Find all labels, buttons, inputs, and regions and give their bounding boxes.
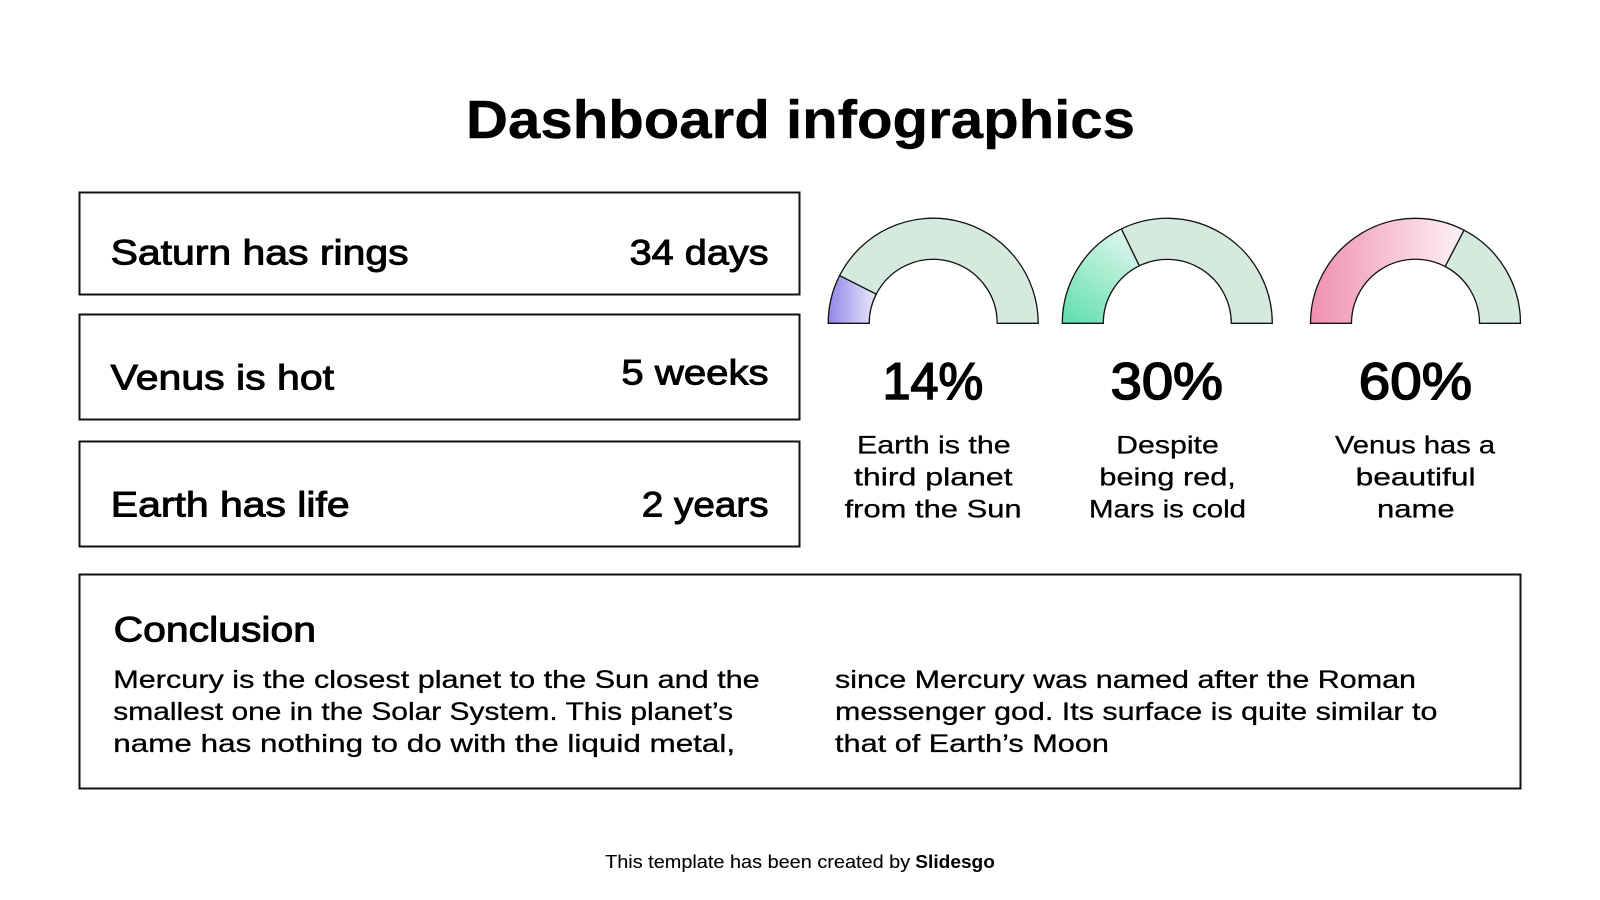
- panel: conclusion: Mercury is the closest planet to the Sun and the: [113, 666, 760, 694]
- panel: conclusion: smallest one in the Solar System. This planet’s: [113, 698, 733, 726]
- panel: Venus row: [80, 314, 800, 420]
- panel: Saturn row: Saturn has rings: [111, 233, 409, 272]
- gauge: 30%: [1062, 218, 1272, 523]
- gauge: 30%: Despite: [1116, 431, 1219, 459]
- gauge: 60%: Venus has a: [1335, 431, 1495, 459]
- footer credit: Slidesgo: [915, 852, 995, 872]
- gauge: 14%: [828, 218, 1038, 523]
- panel: Earth row: [80, 442, 800, 546]
- panel: conclusion: since Mercury was named after the Roman: [835, 666, 1416, 694]
- panel: Earth row: 2 years: [642, 485, 769, 524]
- gauge: 14%: from the Sun: [845, 495, 1022, 523]
- gauge: 60%: 60%: [1359, 353, 1472, 411]
- panel: Saturn row: 34 days: [630, 233, 769, 272]
- gauge: 30%: 30%: [1111, 353, 1223, 411]
- gauge: 30%: being red,: [1099, 463, 1236, 491]
- panel: Earth row: Earth has life: [111, 485, 350, 524]
- panel: conclusion: that of Earth’s Moon: [835, 730, 1109, 758]
- gauge: 14%: 14%: [883, 353, 983, 411]
- panel: Saturn row: [80, 192, 800, 294]
- gauge: 30%: Mars is cold: [1089, 495, 1246, 523]
- panel: conclusion: Conclusion: [114, 611, 316, 650]
- title: Dashboard infographics: [466, 90, 1135, 150]
- panel: conclusion: [80, 574, 1520, 788]
- panel: conclusion: messenger god. Its surface is quite similar to: [835, 698, 1437, 726]
- panel: conclusion: name has nothing to do with the liquid metal,: [113, 730, 735, 758]
- gauge: 14%: third planet: [854, 463, 1013, 491]
- footer credit: This template has been created by: [605, 852, 910, 872]
- gauge: 14%: Earth is the: [857, 431, 1011, 459]
- gauge: 60%: beautiful: [1356, 463, 1476, 491]
- gauge: 60%: [1310, 218, 1520, 523]
- panel: Venus row: 5 weeks: [621, 354, 769, 393]
- gauge: 60%: name: [1377, 495, 1455, 523]
- panel: Venus row: Venus is hot: [111, 359, 334, 398]
